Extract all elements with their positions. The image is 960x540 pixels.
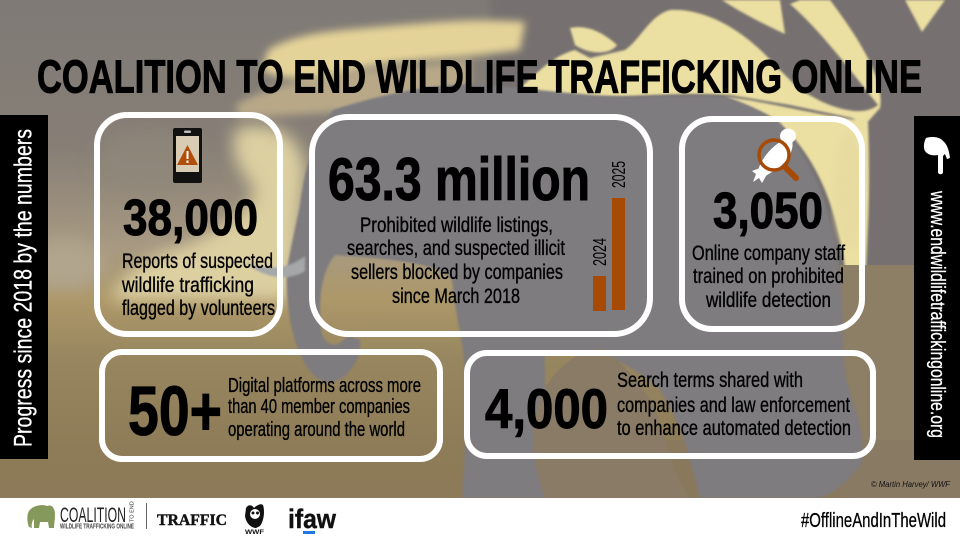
description: than 40 member companies <box>228 396 410 418</box>
description: searches, and suspected illicit <box>347 237 565 260</box>
stat: 38,000: 38,000 <box>123 189 258 246</box>
website address: www.endwildlifetraffickingonline.org <box>926 190 948 438</box>
stat: 63.3 million: 63.3 million <box>328 146 590 213</box>
footer bar <box>0 498 960 540</box>
icon: pointing hand <box>924 137 950 174</box>
logo: coalition elephant: WILDLIFE TRAFFICKING ONLINE <box>60 524 134 530</box>
description: sellers blocked by companies <box>351 261 563 284</box>
description: companies and law enforcement <box>617 394 850 417</box>
upper canopy glow <box>235 20 525 118</box>
logo: WWF panda: WWF <box>245 530 264 536</box>
bar chart: 2025 <box>609 161 629 188</box>
panel: digital platforms <box>102 352 440 459</box>
description <box>692 242 845 312</box>
description <box>617 369 851 440</box>
stat: 4,000: 4,000 <box>485 377 608 440</box>
logo: ifaw: ifaw <box>288 504 337 534</box>
logo: TRAFFIC: TRAFFIC <box>157 512 227 529</box>
description: flagged by volunteers <box>122 297 275 320</box>
left side banner: Progress since 2018 by the numbers <box>10 129 38 447</box>
logo: coalition elephant <box>27 501 135 530</box>
description: Digital platforms across more <box>228 375 421 397</box>
tan ground between legs <box>533 349 690 498</box>
description <box>228 375 421 441</box>
description: Online company staff <box>692 242 845 265</box>
left sky glow <box>25 126 305 300</box>
panel: listings blocked <box>312 117 650 334</box>
description: operating around the world <box>228 419 405 441</box>
description: since March 2018 <box>392 285 520 308</box>
elephant silhouette <box>287 84 863 498</box>
description: Prohibited wildlife listings, <box>360 214 553 237</box>
stat: 3,050: 3,050 <box>713 182 823 239</box>
dark tree canopy, right <box>490 0 960 300</box>
panel: staff trained <box>682 119 862 329</box>
description: wildlife trafficking <box>121 274 254 297</box>
icon: feather under magnifying glass <box>752 128 796 183</box>
right side banner <box>914 116 960 460</box>
bar chart <box>590 161 629 311</box>
description: to enhance automated detection <box>617 417 851 440</box>
lower right ground <box>840 265 960 498</box>
description: trained on prohibited <box>693 265 844 288</box>
icon: phone with warning <box>173 128 202 183</box>
photo credit: © Martin Harvey/ WWF <box>871 480 951 489</box>
tusk <box>246 256 305 277</box>
logo: WWF panda <box>245 504 264 536</box>
logo: coalition elephant: COALITION <box>60 504 126 527</box>
logo: coalition elephant: TO END <box>130 501 136 522</box>
panel: volunteer reports <box>97 115 280 334</box>
left side banner <box>0 115 48 459</box>
stat: 50+: 50+ <box>128 372 222 450</box>
description: wildlife detection <box>705 289 831 312</box>
description <box>121 250 275 320</box>
panel: search terms <box>467 353 873 456</box>
bar chart: 2024 <box>590 238 610 266</box>
description: Search terms shared with <box>617 369 803 392</box>
description <box>347 214 565 308</box>
description: Reports of suspected <box>122 250 273 273</box>
